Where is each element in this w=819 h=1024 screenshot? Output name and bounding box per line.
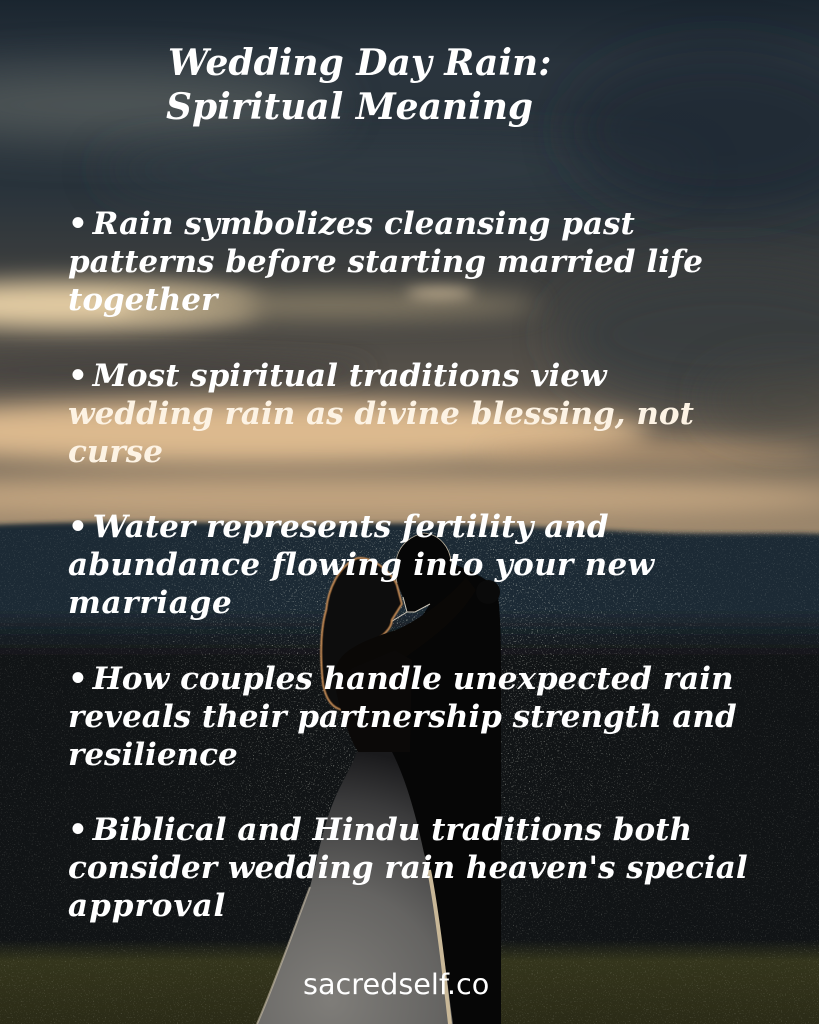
dress backlit left edge <box>257 887 310 1024</box>
bullet: cleansing: • Rain symbolizes cleansing past <box>68 206 635 242</box>
bullet: divine blessing: curse <box>68 434 163 470</box>
sky <box>0 0 819 540</box>
title: Spiritual Meaning <box>166 86 533 128</box>
bullet: resilience: • How couples handle unexpected rain <box>68 661 734 697</box>
bullet: resilience: resilience <box>68 737 238 773</box>
dark field <box>0 655 819 955</box>
bullet: fertility: • Water represents fertility and <box>68 509 609 545</box>
bullet: cleansing: together <box>68 282 217 318</box>
bullet: heaven's approval: • Biblical and Hindu traditions both <box>68 812 692 848</box>
icon: groom bun <box>476 580 500 604</box>
bullet: resilience <box>68 661 737 773</box>
bullet: fertility <box>68 509 656 621</box>
icon: wedding dress <box>257 752 453 1024</box>
bullet: fertility: marriage <box>68 585 232 621</box>
rain specks <box>0 530 819 1024</box>
footer: website: sacredself.co <box>303 967 489 1001</box>
icon: bride hair and head <box>321 558 402 710</box>
icon: groom silhouette <box>390 533 501 1024</box>
bullet: divine blessing: wedding rain as divine blessing, not <box>68 396 694 432</box>
bullet: cleansing <box>68 206 703 318</box>
groom backlit head rim <box>395 533 451 583</box>
bullet: heaven's approval: consider wedding rain heaven's special <box>68 850 748 886</box>
bullet: heaven's approval <box>68 812 748 924</box>
grass foreground <box>0 940 819 1024</box>
icon: bride bodice <box>336 650 412 752</box>
couple silhouette <box>257 533 501 1024</box>
bullet: heaven's approval: approval <box>68 888 226 924</box>
title <box>166 42 552 128</box>
dress backlit right edge <box>429 870 450 1024</box>
distant hills <box>0 522 819 670</box>
bullet: divine blessing: • Most spiritual traditions view <box>68 358 607 394</box>
bullet: divine blessing <box>68 358 694 470</box>
bullet: resilience: reveals their partnership strength and <box>68 699 737 735</box>
icon: bride arm around groom <box>336 577 476 690</box>
bullet: fertility: abundance flowing into your new <box>68 547 654 583</box>
groom backlit collar rim <box>381 597 430 628</box>
bullet: cleansing: patterns before starting married life <box>68 244 703 280</box>
title: Wedding Day Rain: <box>168 42 552 84</box>
